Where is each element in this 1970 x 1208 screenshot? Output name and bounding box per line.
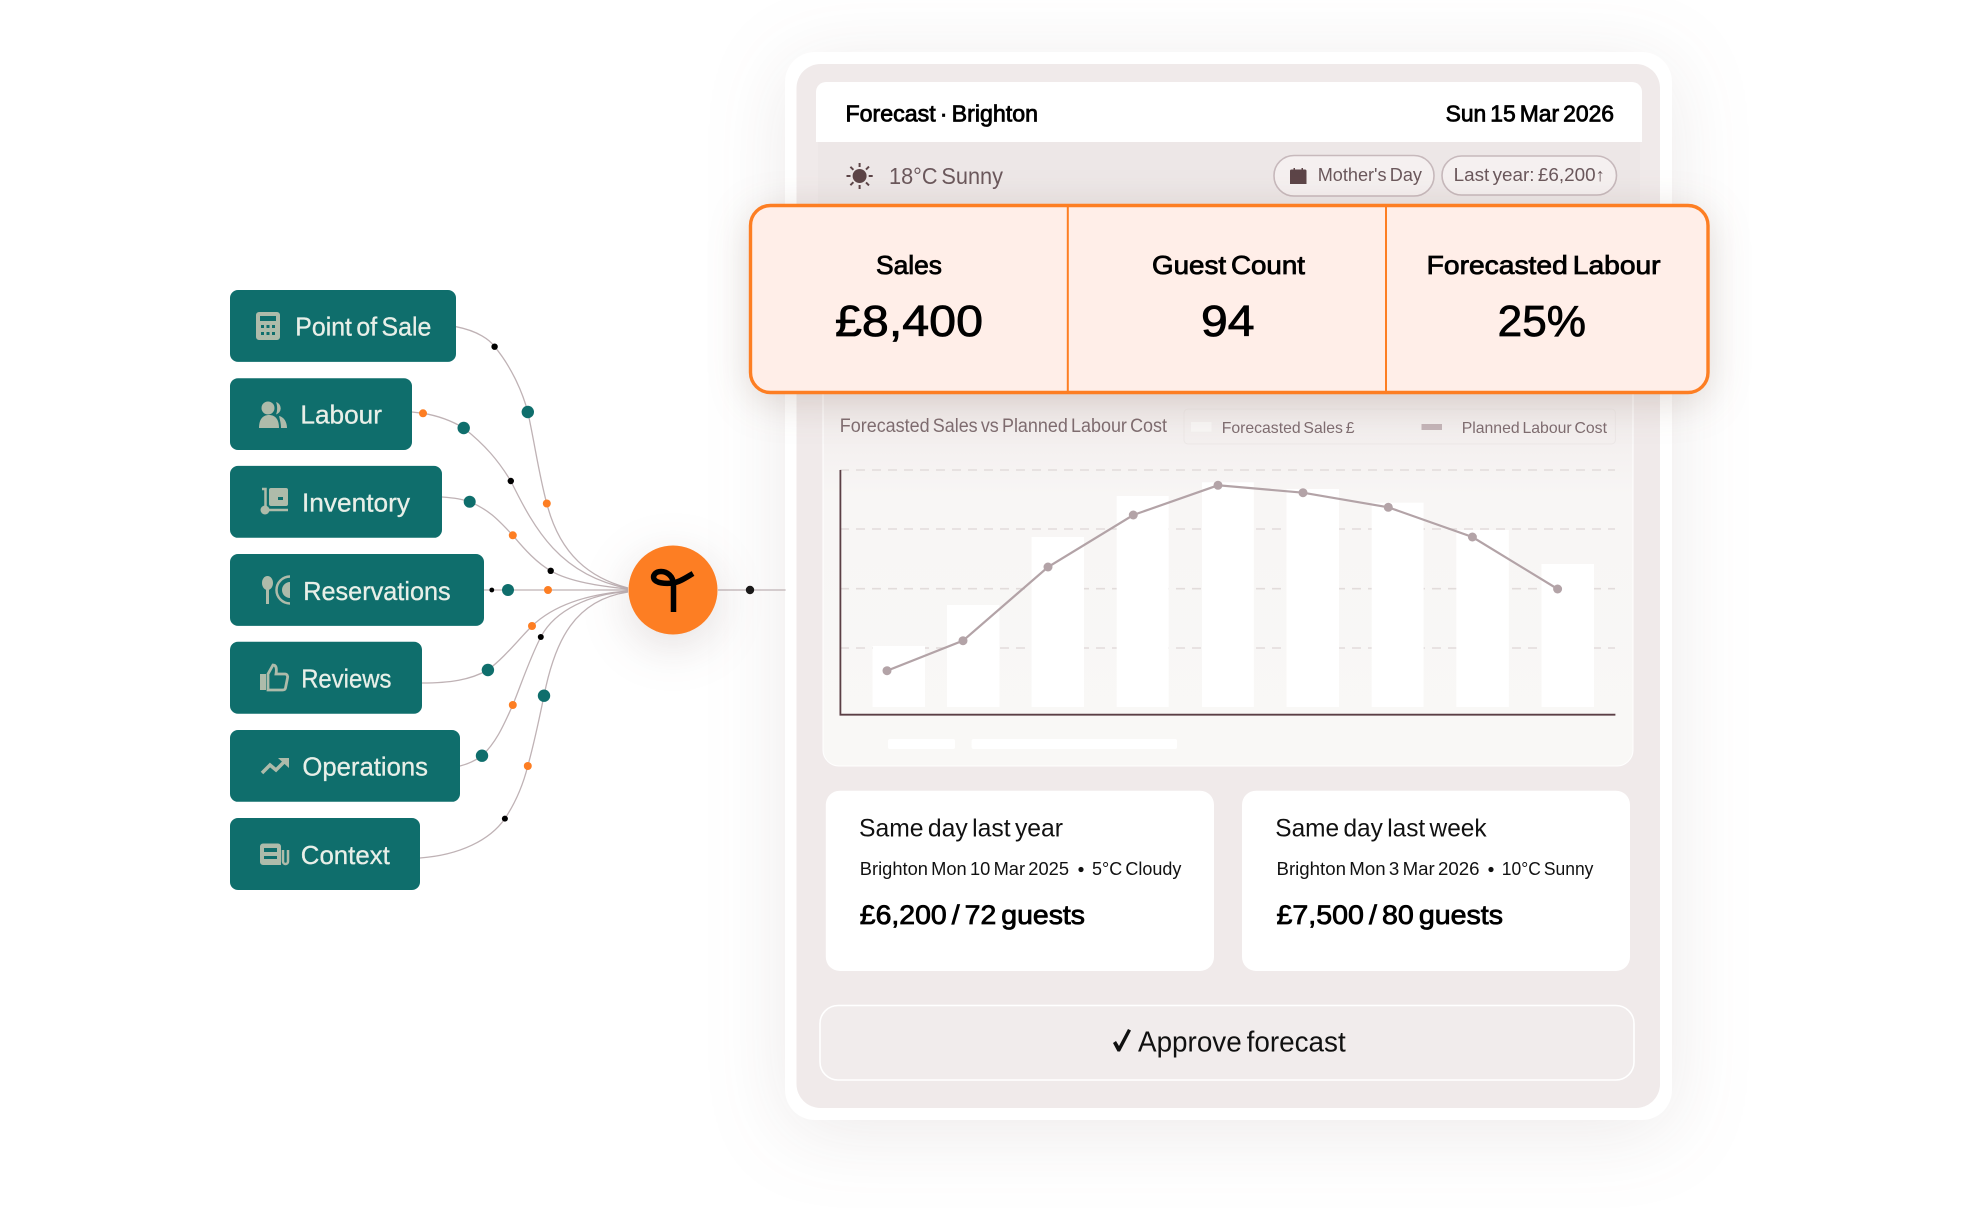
source: Reviews: Reviews xyxy=(301,664,391,694)
card: same day last year: Brighton Mon 10 Mar 2025 xyxy=(860,859,1069,879)
card: same day last year xyxy=(826,791,1214,971)
icon: sun xyxy=(846,163,873,189)
metric: guest count: 94 xyxy=(1201,297,1255,346)
panel: key metrics xyxy=(750,206,1708,392)
button: approve forecast: Approve forecast xyxy=(1138,1027,1346,1059)
metric: guest count xyxy=(1152,250,1306,346)
source: Labour xyxy=(230,378,412,450)
icon: people xyxy=(259,402,287,428)
header card: Sun 15 Mar 2026 xyxy=(1446,101,1614,127)
source: Context xyxy=(230,818,420,890)
card: same day last year: £6,200 / 72 guests xyxy=(860,900,1085,930)
source: Labour: Labour xyxy=(300,400,382,430)
metric: forecasted labour: 25% xyxy=(1498,297,1586,346)
axis label placeholders xyxy=(888,739,1177,749)
button: approve forecast xyxy=(820,1006,1634,1080)
icon: hand truck xyxy=(260,488,288,514)
card: same day last year: Same day last year xyxy=(859,815,1063,843)
icon: trend arrow xyxy=(262,758,289,773)
metric: forecasted labour xyxy=(1427,250,1661,346)
pill: Last year: Last year: £6,200↑ xyxy=(1454,165,1605,185)
legend xyxy=(1184,409,1615,444)
card: same day last week: Brighton Mon 3 Mar 2026 xyxy=(1276,859,1480,879)
source: Operations: Operations xyxy=(302,752,428,782)
card: same day last week xyxy=(1242,791,1630,971)
source: Inventory: Inventory xyxy=(302,488,410,518)
icon: newspaper xyxy=(260,844,288,865)
source: Reservations xyxy=(230,554,484,626)
header card: Forecast · Brighton xyxy=(846,101,1038,127)
chart title: Forecasted Sales vs Planned Labour Cost xyxy=(840,416,1168,437)
panel: chart xyxy=(823,380,1633,766)
source: Point of Sale xyxy=(230,290,456,362)
chart axes xyxy=(840,470,1615,715)
icon: thumbs up xyxy=(260,665,288,690)
metric: sales: Sales xyxy=(876,250,942,280)
source: Reviews xyxy=(230,642,422,714)
card: same day last week: Same day last week xyxy=(1275,815,1487,843)
metric: guest count: Guest Count xyxy=(1152,250,1306,280)
hub: logo circle xyxy=(628,546,718,634)
panel: forecast dashboard xyxy=(785,52,1672,1120)
pill: Last year xyxy=(1442,156,1616,195)
weather band xyxy=(818,142,1640,208)
metric: forecasted labour: Forecasted Labour xyxy=(1427,250,1661,280)
pill: Mother's Day: Mother's Day xyxy=(1318,165,1422,185)
metric: sales: £8,400 xyxy=(835,297,983,346)
connector dots xyxy=(419,344,754,822)
line chart: planned labour cost xyxy=(882,481,1562,675)
icon: calculator xyxy=(256,312,280,340)
source: Context: Context xyxy=(301,840,391,870)
connector lines xyxy=(412,327,786,858)
card: same day last week: £7,500 / 80 guests xyxy=(1276,900,1503,930)
metric: sales xyxy=(835,250,983,346)
header card xyxy=(816,82,1642,142)
card: same day last week: 10°C Sunny xyxy=(1502,859,1593,879)
weather band: 18°C Sunny xyxy=(889,163,1003,189)
card: same day last year: 5°C Cloudy xyxy=(1092,859,1181,879)
legend: Forecasted Sales £ xyxy=(1222,420,1355,437)
source: Point of Sale: Point of Sale xyxy=(295,311,431,341)
source: Inventory xyxy=(230,466,442,538)
bar chart: forecasted sales xyxy=(872,482,1594,707)
pill: Mother's Day xyxy=(1274,156,1434,196)
source: Reservations: Reservations xyxy=(303,576,451,606)
icon: plate and spoon xyxy=(262,576,290,604)
legend: Planned Labour Cost xyxy=(1462,420,1608,437)
source: Operations xyxy=(230,730,460,802)
